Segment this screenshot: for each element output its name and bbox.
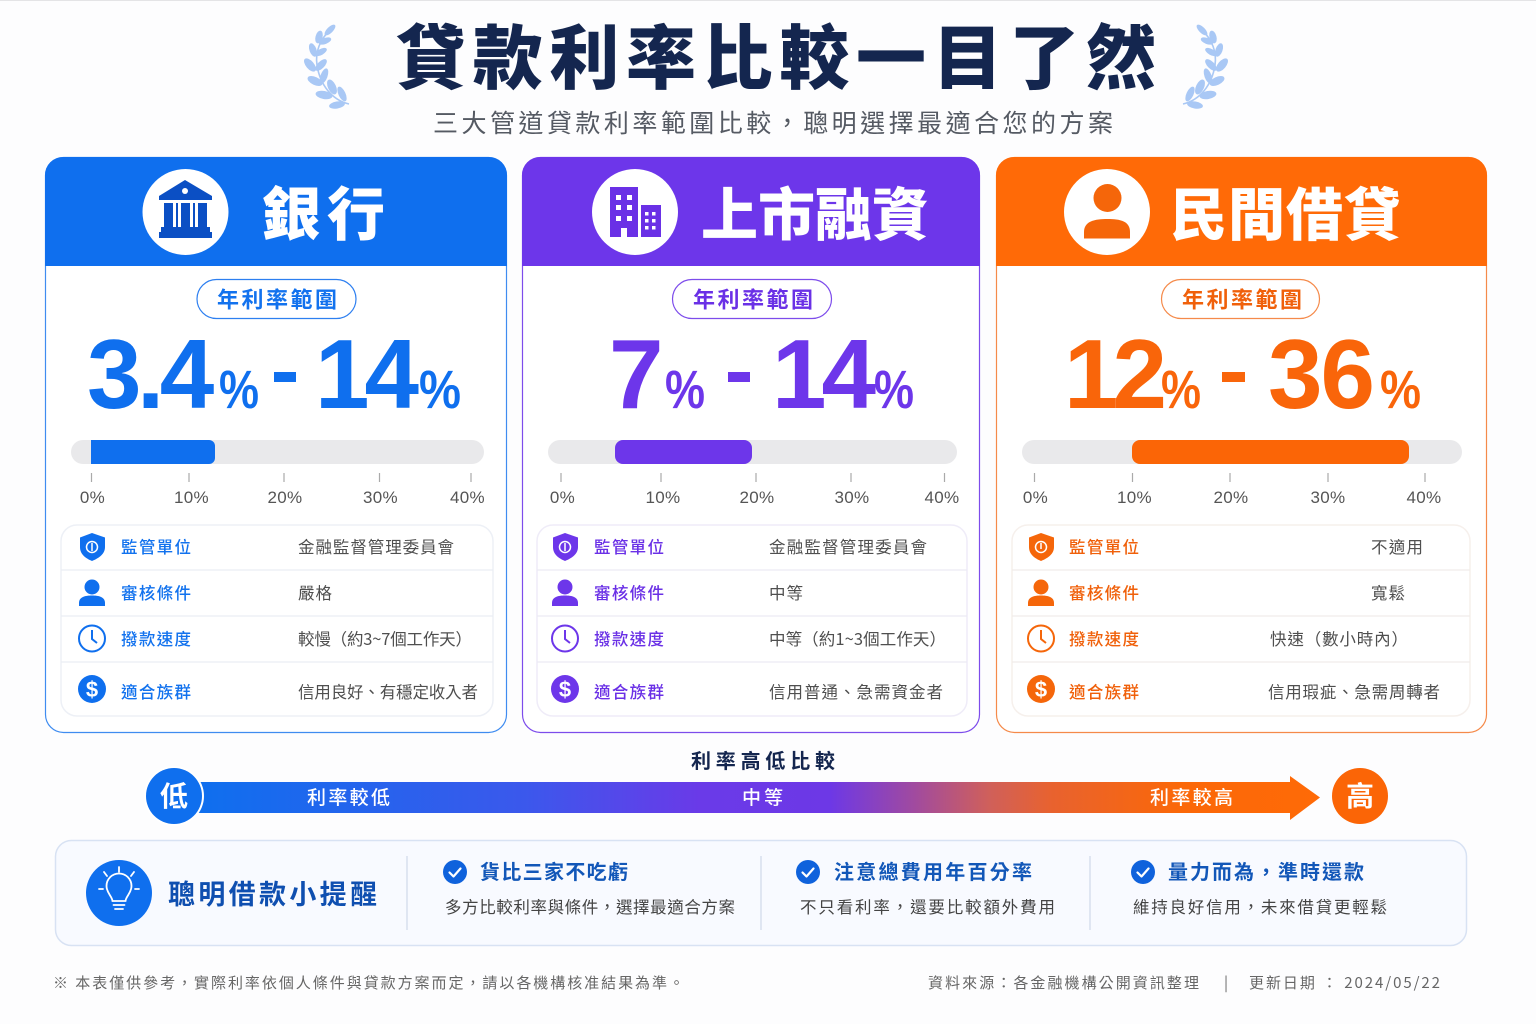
financing range bar	[548, 440, 959, 507]
icon: right laurel	[1183, 23, 1230, 110]
arrow: rate scale	[195, 776, 1320, 820]
bank range bar	[71, 440, 485, 507]
private rate pill	[1162, 280, 1320, 318]
private range bar: 0%	[1023, 488, 1048, 507]
bank range bar: 20%	[268, 488, 302, 507]
financing row labels	[594, 534, 664, 703]
tip 2: 注意總費用年百分率	[834, 856, 1032, 885]
bank range bar: 0%	[80, 488, 105, 507]
financing range bar: 20%	[740, 488, 774, 507]
bank details table	[61, 525, 493, 716]
bank row values: 信用良好、有穩定收入者	[298, 679, 478, 703]
private range bar	[1022, 440, 1462, 507]
private row values: 不適用	[1371, 534, 1423, 558]
subtitle: 三大管道貸款利率範圍比較，聰明選擇最適合您的方案	[433, 104, 1113, 140]
financing range bar: 30%	[835, 488, 869, 507]
source and update date	[928, 972, 1440, 993]
private row labels: 適合族群	[1069, 679, 1139, 703]
bank rate pill: 年利率範圍	[217, 282, 337, 314]
private row labels: 撥款速度	[1069, 626, 1139, 650]
financing row values: 信用普通、急需資金者	[769, 679, 943, 703]
financing rate number: 7	[609, 319, 664, 429]
bank range bar: 30%	[363, 488, 398, 507]
private row labels: 審核條件	[1069, 580, 1139, 604]
panel: bank	[45, 157, 507, 732]
icon: person	[552, 580, 578, 606]
bank header	[45, 157, 507, 266]
icon: shield	[553, 533, 578, 561]
private row values	[1268, 534, 1440, 703]
financing row values: 中等	[769, 580, 803, 604]
icon: dollar	[551, 675, 579, 703]
financing rate number: %	[665, 360, 705, 420]
private row values: 快速（數小時內）	[1270, 626, 1408, 650]
financing range bar: 40%	[925, 488, 959, 507]
icon: office buildings	[610, 187, 661, 237]
private range bar: 30%	[1311, 488, 1345, 507]
bank name: 銀行	[262, 168, 385, 252]
private details table	[1012, 525, 1470, 716]
financing rate pill	[672, 280, 832, 318]
badge: high	[1332, 768, 1388, 824]
private rate number	[1064, 319, 1421, 429]
financing row labels: 撥款速度	[594, 626, 664, 650]
icon: bank building	[159, 180, 212, 238]
private row values: 寬鬆	[1371, 580, 1405, 604]
private range bar: 40%	[1407, 488, 1441, 507]
icon: dollar	[1027, 675, 1055, 703]
badge: low	[144, 766, 204, 826]
tip 1: 貨比三家不吃虧	[480, 856, 628, 885]
bank row values: 較慢（約3~7個工作天）	[298, 626, 472, 650]
private rate number: %	[1380, 360, 1421, 420]
footnote: ※ 本表僅供參考，實際利率依個人條件與貸款方案而定，請以各機構核准結果為準。	[53, 972, 684, 993]
source and update date: 更新日期 ： 2024/05/22	[1249, 972, 1440, 993]
title: 貸款利率比較一目了然	[396, 3, 1156, 104]
bank row values	[298, 534, 478, 703]
financing row values: 中等（約1~3個工作天）	[769, 626, 946, 650]
private header	[996, 157, 1487, 266]
badge: low: 低	[160, 775, 188, 815]
bank row values: 金融監督管理委員會	[298, 534, 454, 558]
bank rate number	[87, 319, 461, 429]
private range bar: 20%	[1214, 488, 1248, 507]
tips title: 聰明借款小提醒	[168, 873, 377, 912]
financing header	[522, 157, 980, 266]
financing range bar: 10%	[646, 488, 680, 507]
tip 3: 維持良好信用，未來借貸更輕鬆	[1133, 894, 1387, 918]
bank rate number: 14	[315, 319, 419, 429]
financing row values: 金融監督管理委員會	[769, 534, 928, 558]
bank row labels: 撥款速度	[121, 626, 191, 650]
tip 2: 不只看利率，還要比較額外費用	[800, 894, 1055, 918]
source and update date: 資料來源：各金融機構公開資訊整理	[928, 972, 1199, 993]
financing name: 上市融資	[701, 170, 929, 252]
label low: 利率較低	[307, 783, 390, 810]
icon: light bulb	[86, 860, 152, 926]
icon: shield	[1029, 533, 1054, 561]
financing rate number	[609, 319, 914, 429]
comparison heading: 利率高低比較	[691, 745, 835, 774]
private row values: 信用瑕疵、急需周轉者	[1268, 679, 1440, 703]
financing row values	[769, 534, 946, 703]
financing details table	[537, 525, 967, 716]
panel: smart borrowing tips	[56, 840, 1466, 946]
icon: person	[79, 580, 105, 606]
private rate pill: 年利率範圍	[1182, 282, 1302, 314]
private name: 民間借貸	[1170, 170, 1401, 252]
source and update date: |	[1224, 972, 1228, 993]
bank row values: 嚴格	[298, 580, 332, 604]
tip 3	[1131, 856, 1387, 918]
panel: private lending	[996, 157, 1487, 732]
icon: dollar	[78, 675, 106, 703]
bank rate pill	[197, 280, 356, 318]
financing rate number: 14	[772, 319, 876, 429]
bank row labels: 審核條件	[121, 580, 191, 604]
financing row labels: 審核條件	[594, 580, 664, 604]
icon: person	[1084, 184, 1130, 238]
private row labels: 監管單位	[1069, 534, 1139, 558]
bank rate number: 3.4	[87, 319, 214, 429]
financing row labels: 監管單位	[594, 534, 664, 558]
icon: dollar: $	[559, 677, 571, 702]
private rate number: %	[1161, 360, 1201, 420]
bank rate number: %	[219, 360, 259, 420]
panel: listed financing	[522, 157, 980, 732]
label mid: 中等	[742, 783, 783, 810]
bank rate number: %	[419, 360, 461, 420]
icon: person	[1028, 580, 1054, 606]
label high: 利率較高	[1150, 783, 1233, 810]
tip 1: 多方比較利率與條件，選擇最適合方案	[445, 894, 735, 918]
icon: left laurel	[302, 23, 349, 110]
bank range bar: 40%	[450, 488, 485, 507]
icon: clock	[552, 626, 578, 652]
private rate number: 12	[1064, 319, 1164, 429]
financing rate number: %	[874, 360, 914, 420]
bank row labels	[121, 534, 191, 703]
icon: clock	[1028, 626, 1054, 652]
financing rate pill: 年利率範圍	[693, 282, 813, 314]
tip 3: 量力而為，準時還款	[1168, 856, 1364, 885]
icon: dollar: $	[1035, 677, 1047, 702]
icon: shield	[80, 533, 105, 561]
icon: dollar: $	[86, 677, 98, 702]
private range bar: 10%	[1117, 488, 1152, 507]
bank row labels: 監管單位	[121, 534, 191, 558]
icon: clock	[79, 626, 105, 652]
tip 2	[796, 856, 1055, 918]
financing row labels: 適合族群	[594, 679, 664, 703]
bank row labels: 適合族群	[121, 679, 191, 703]
financing range bar: 0%	[550, 488, 575, 507]
private rate number: 36	[1268, 319, 1373, 429]
tip 1	[443, 856, 735, 918]
badge: high: 高	[1346, 775, 1374, 815]
private row labels	[1069, 534, 1139, 703]
bank range bar: 10%	[174, 488, 209, 507]
